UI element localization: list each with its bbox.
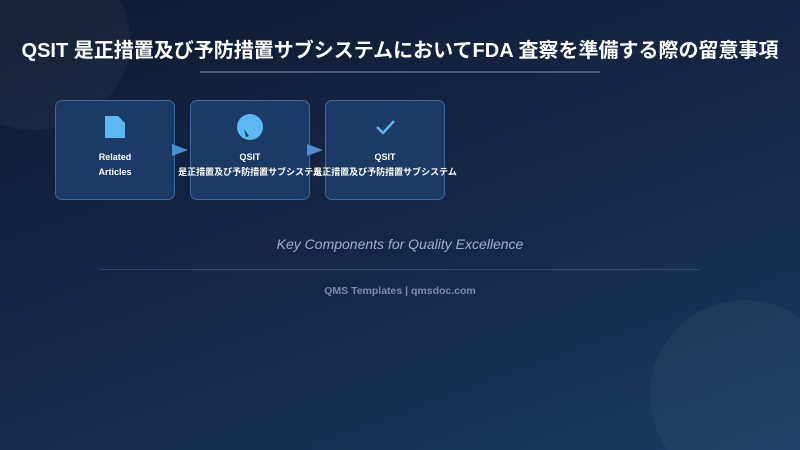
panel: QSIT 1: 是正措置及び予防措置サブシステム — [178, 167, 322, 177]
panel: QSIT 1: QSIT — [239, 152, 260, 162]
arrow 1 — [172, 144, 188, 156]
panel: related articles — [55, 100, 175, 200]
footer: QMS Templates | qmsdoc.com — [324, 285, 476, 297]
icon: circle — [237, 114, 263, 140]
panel: related articles: Articles — [98, 167, 132, 177]
subtitle: Key Components for Quality Excellence — [277, 236, 523, 252]
panel: QSIT 2 — [325, 100, 445, 200]
panel: QSIT 1 — [190, 100, 310, 200]
panel: QSIT 2: QSIT — [374, 152, 396, 162]
icon: check — [376, 120, 395, 135]
icon: document — [105, 116, 125, 138]
title: QSIT 是正措置及び予防措置サブシステムにおいてFDA 査察を準備する際の留意事項 — [22, 40, 778, 62]
panel: related articles: Related — [99, 152, 131, 162]
arrow 2 — [307, 144, 323, 156]
panel: QSIT 2: 是正措置及び予防措置サブシステム — [313, 167, 457, 177]
